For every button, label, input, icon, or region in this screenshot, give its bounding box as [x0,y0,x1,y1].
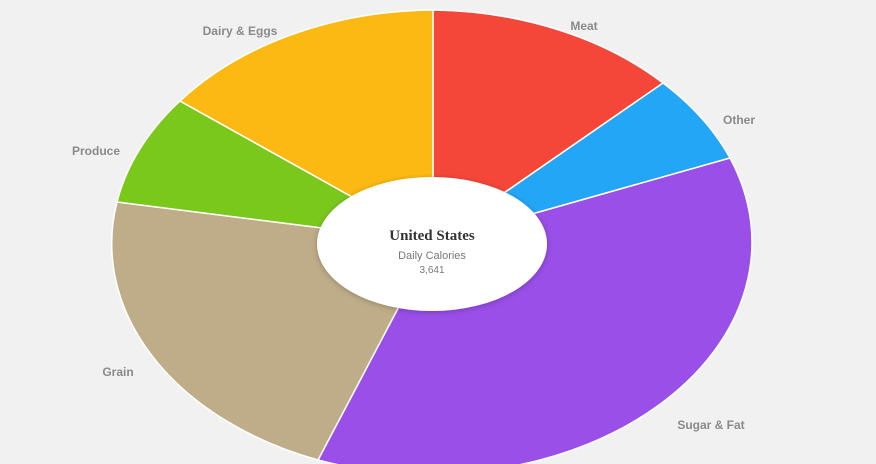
slice: other [433,83,730,242]
center label: Daily Calories [398,250,466,262]
slice labels: Sugar & Fat [677,418,745,432]
center label: 3,641 [419,265,445,276]
slice: dairy & eggs [180,10,433,242]
center label: United States [389,228,475,244]
slice labels: Other [723,113,755,127]
slice: grain [112,202,433,460]
slice labels: Dairy & Eggs [203,24,278,38]
center label [317,177,547,311]
slice labels: Produce [72,144,120,158]
slice: produce [117,101,433,242]
slice: sugar & fat [318,158,752,464]
slice labels: Grain [102,365,134,379]
slice: meat [433,10,663,242]
slice labels: Meat [570,19,598,33]
slice labels [72,19,755,432]
